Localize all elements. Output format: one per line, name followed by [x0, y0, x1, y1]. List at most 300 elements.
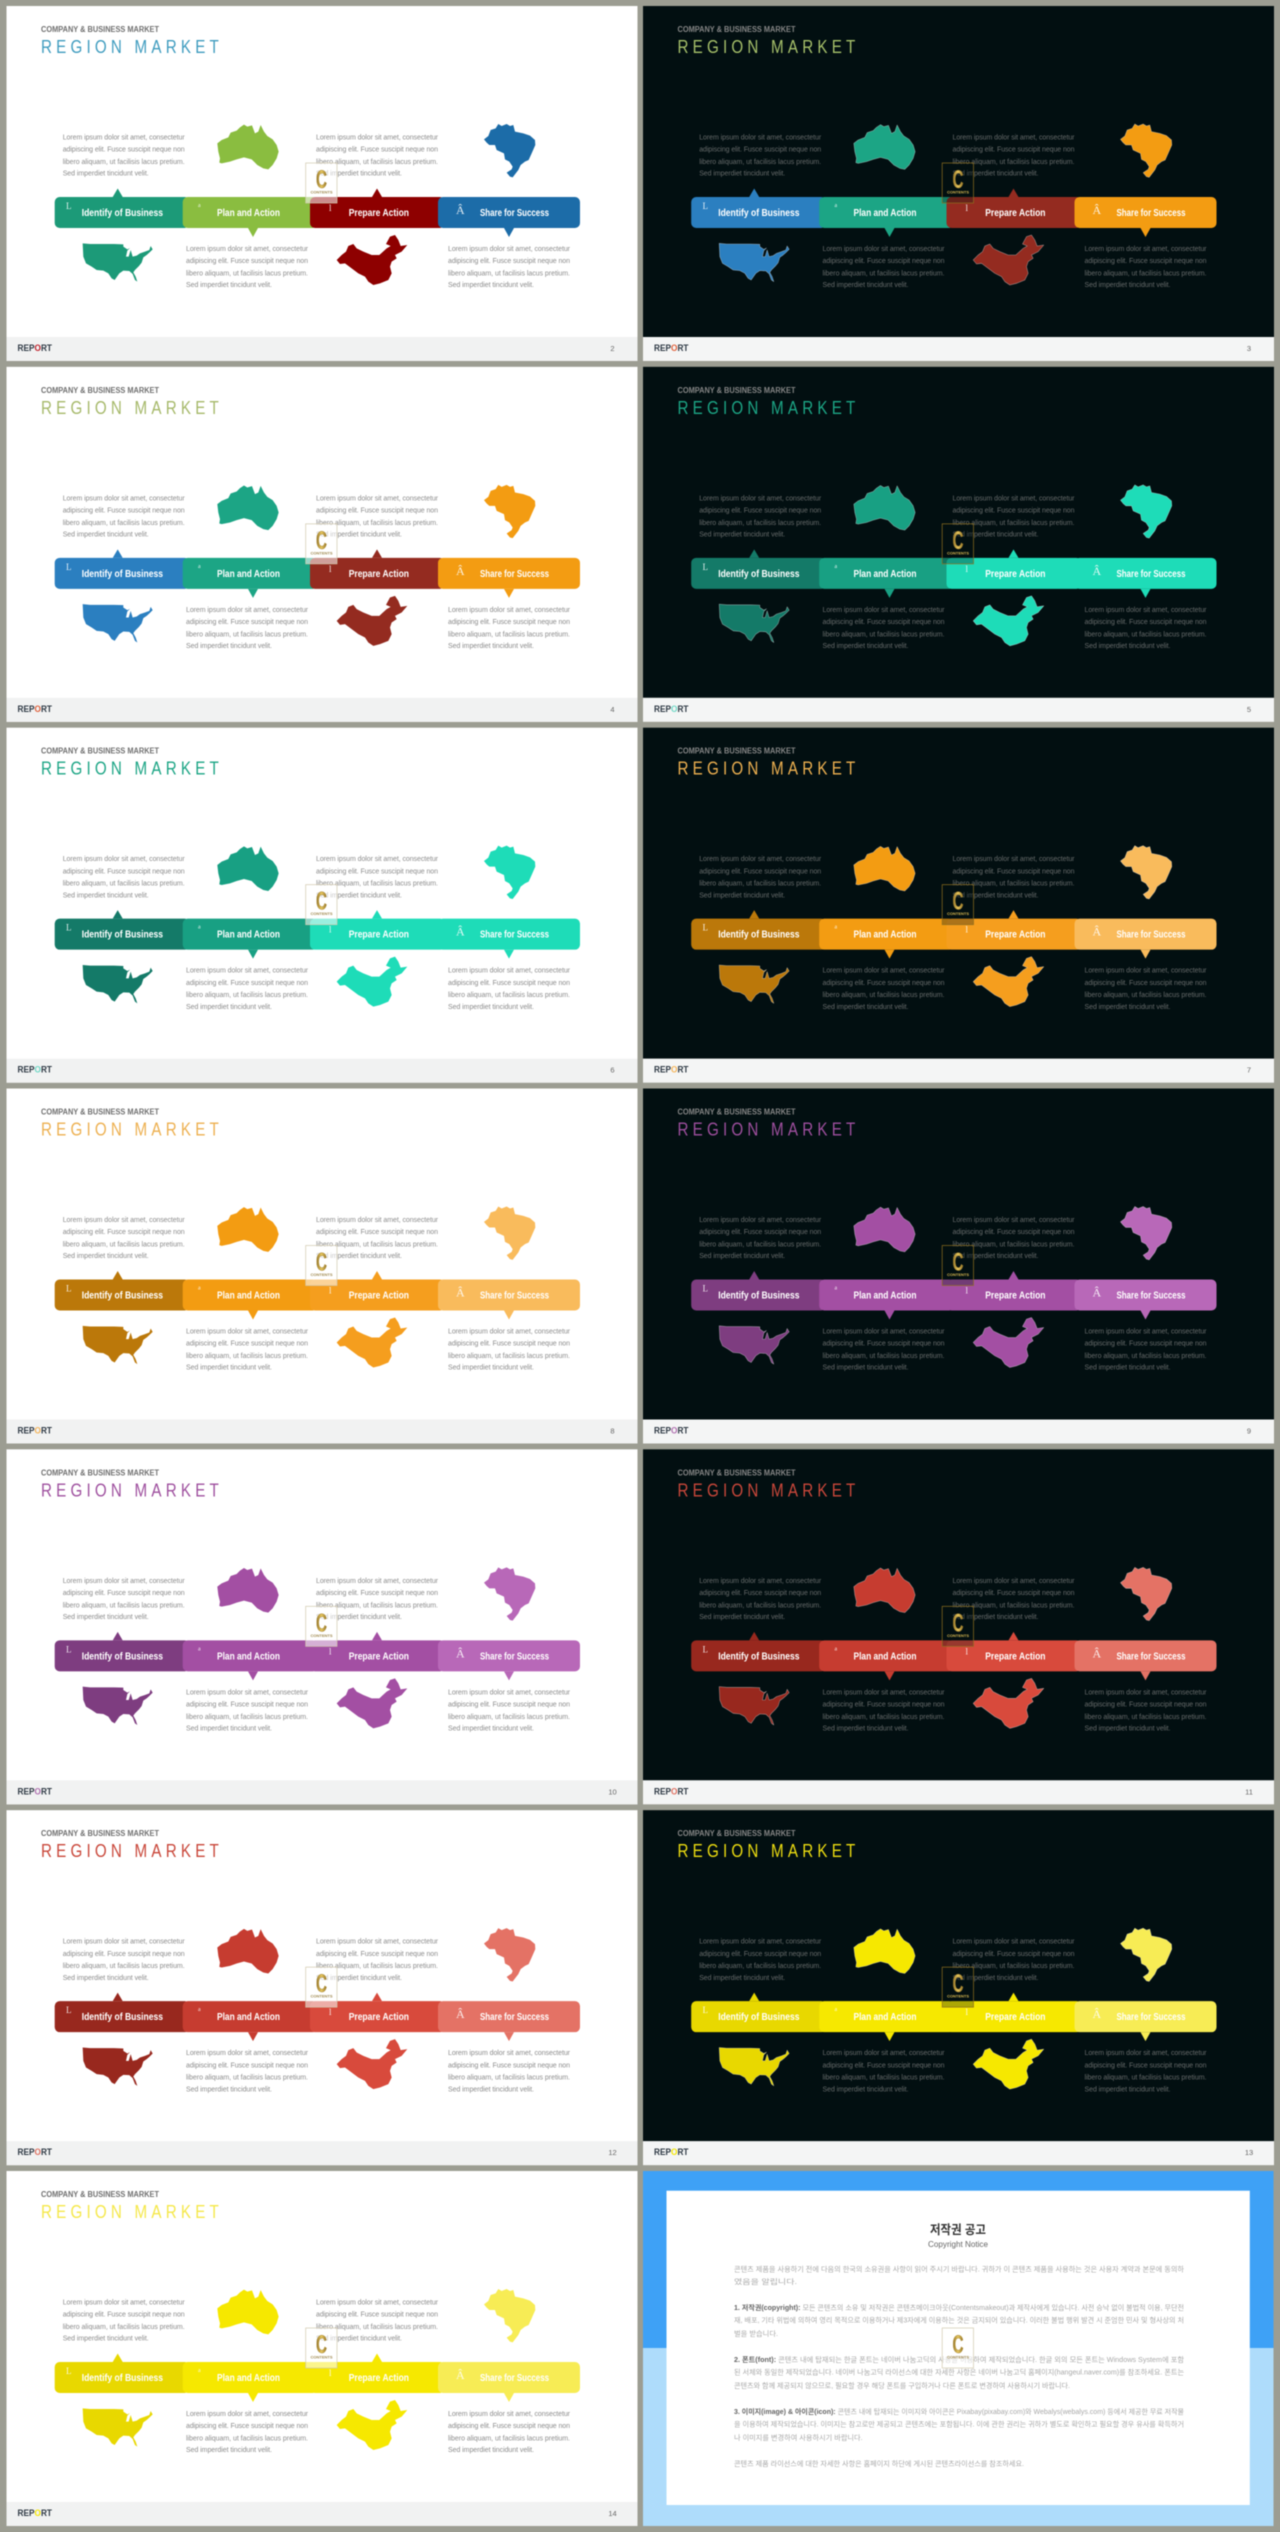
step bar: l — [966, 925, 968, 935]
watermark logo — [306, 1246, 337, 1286]
slide background — [6, 367, 638, 722]
text block 2: libero aliquam, ut facilisis lacus pretium. — [186, 270, 308, 278]
step bar: Share for Success — [480, 929, 549, 941]
text block 2: libero aliquam, ut facilisis lacus pretium. — [186, 1353, 308, 1360]
text block 3: adipiscing elit. Fusce suscipit neque non — [952, 1590, 1075, 1597]
text block 2: libero aliquam, ut facilisis lacus pretium. — [186, 2436, 308, 2442]
watermark logo — [306, 1606, 337, 1646]
step bar: Plan and Action — [217, 1650, 280, 1662]
text block 4: adipiscing elit. Fusce suscipit neque non — [1084, 619, 1207, 626]
watermark logo: C — [316, 166, 327, 194]
step bar: Plan and Action — [854, 1290, 916, 1302]
step bar: L — [66, 1284, 72, 1294]
footer bar — [6, 1059, 638, 1083]
step bar: L — [66, 1644, 72, 1654]
text block 2: Sed imperdiet tincidunt velit. — [822, 2086, 909, 2093]
text block 1: libero aliquam, ut facilisis lacus pretium. — [699, 1242, 821, 1248]
text block 3: Lorem ipsum dolor sit amet, consectetur — [316, 2300, 439, 2306]
footer bar — [643, 698, 1274, 722]
text block 1: libero aliquam, ut facilisis lacus pretium. — [63, 2324, 185, 2331]
map: Australia — [854, 1929, 915, 1973]
step bar: a — [198, 1286, 201, 1292]
text block 2: Lorem ipsum dolor sit amet, consectetur — [822, 246, 945, 253]
step bar: Plan and Action — [854, 568, 916, 580]
text block 3: Lorem ipsum dolor sit amet, consectetur — [316, 495, 439, 502]
text block 1: Sed imperdiet tincidunt velit. — [63, 2336, 149, 2343]
map: China — [337, 1317, 407, 1367]
step bar: Identify of Business — [82, 2372, 163, 2384]
text block 2: libero aliquam, ut facilisis lacus pretium. — [822, 992, 945, 999]
text block 1: Lorem ipsum dolor sit amet, consectetur — [699, 1939, 822, 1946]
text block 4: libero aliquam, ut facilisis lacus pretium. — [1084, 270, 1207, 278]
step bar: Prepare Action — [985, 1650, 1046, 1662]
font paragraph: 된 서체와 동일한 제작되었습니다. 네이버 나눔고딕 라이선스에 대한 자세한 사항은 네이버 나눔고딕 홈페이지(hangeul.naver.com)를 참조하세요. 폰트는 — [734, 2368, 1185, 2377]
text block 3: libero aliquam, ut facilisis lacus pretium. — [316, 1242, 438, 1248]
step bar: L — [702, 1644, 708, 1654]
text block 1: libero aliquam, ut facilisis lacus pretium. — [63, 1242, 185, 1248]
watermark logo — [942, 163, 974, 203]
step bar: Â — [456, 1286, 465, 1300]
text block 3: libero aliquam, ut facilisis lacus pretium. — [952, 520, 1075, 527]
text block 4: libero aliquam, ut facilisis lacus pretium. — [448, 992, 570, 999]
text block 4: Sed imperdiet tincidunt velit. — [1084, 1365, 1171, 1372]
text block 3: Sed imperdiet tincidunt velit. — [316, 171, 402, 178]
text block 2: Lorem ipsum dolor sit amet, consectetur — [186, 1689, 309, 1696]
map: China — [973, 2039, 1044, 2089]
panel: slide 4 — [6, 367, 638, 722]
text block 2: libero aliquam, ut facilisis lacus pretium. — [822, 2075, 945, 2082]
step bar: a — [198, 203, 201, 209]
watermark logo — [306, 1967, 337, 2007]
text block 3: Lorem ipsum dolor sit amet, consectetur — [952, 134, 1075, 142]
step bar: Share for Success — [480, 2372, 549, 2384]
step bar: Plan and Action — [854, 929, 916, 941]
step bar: a — [834, 1286, 838, 1292]
text block 3: libero aliquam, ut facilisis lacus pretium. — [316, 2324, 438, 2331]
text block 1: Lorem ipsum dolor sit amet, consectetur — [63, 1939, 185, 1946]
text block 3: Sed imperdiet tincidunt velit. — [952, 1614, 1039, 1621]
text block 1: Sed imperdiet tincidunt velit. — [699, 892, 785, 899]
text block 2: Sed imperdiet tincidunt velit. — [186, 2447, 272, 2454]
text block 1: libero aliquam, ut facilisis lacus pretium. — [63, 881, 185, 888]
step bar: Share for Success — [1116, 2011, 1186, 2023]
text block 1: libero aliquam, ut facilisis lacus pretium. — [699, 881, 821, 888]
text block 2: Sed imperdiet tincidunt velit. — [186, 1365, 272, 1372]
text block 4: Sed imperdiet tincidunt velit. — [1084, 1004, 1171, 1011]
map: USA — [83, 2047, 153, 2086]
step bar: Prepare Action — [985, 2011, 1046, 2023]
text block 2: libero aliquam, ut facilisis lacus pretium. — [186, 2075, 308, 2082]
map: China — [973, 596, 1044, 646]
step bar: Share for Success — [480, 1650, 549, 1662]
text block 4: libero aliquam, ut facilisis lacus pretium. — [448, 2436, 570, 2442]
text block 4: Sed imperdiet tincidunt velit. — [448, 1004, 534, 1011]
text block 1: adipiscing elit. Fusce suscipit neque non — [699, 1590, 821, 1597]
panel: slide 13 — [643, 1810, 1274, 2165]
watermark logo: C — [316, 1970, 327, 1998]
step bar: a — [198, 564, 201, 570]
image paragraph: 나 이미지를 변경하여 사용하시기 바랍니다. — [734, 2433, 863, 2442]
text block 4: adipiscing elit. Fusce suscipit neque non — [1084, 258, 1207, 265]
step bar: Â — [1092, 925, 1102, 939]
step bar: Share for Success — [480, 207, 549, 219]
watermark logo: C — [316, 1248, 327, 1276]
text block 1: Sed imperdiet tincidunt velit. — [63, 1253, 149, 1260]
text block 4: Sed imperdiet tincidunt velit. — [448, 2086, 534, 2093]
step bar: L — [702, 1284, 708, 1294]
step bar: l — [329, 925, 332, 935]
footer bar — [643, 1420, 1274, 1444]
step bar: L — [66, 923, 72, 933]
text block 4: Lorem ipsum dolor sit amet, consectetur — [448, 1689, 571, 1696]
title: REGION MARKET — [678, 1480, 860, 1500]
text block 3: libero aliquam, ut facilisis lacus pretium. — [952, 159, 1075, 166]
step bar: Â — [1092, 1286, 1102, 1300]
map: Brazil — [1120, 1567, 1172, 1621]
text block 4: libero aliquam, ut facilisis lacus pretium. — [1084, 1714, 1207, 1721]
map: Brazil — [484, 1928, 535, 1981]
text block 2: Lorem ipsum dolor sit amet, consectetur — [186, 246, 309, 253]
panel: slide 7 — [643, 728, 1274, 1083]
text block 2: Sed imperdiet tincidunt velit. — [186, 1004, 272, 1011]
text block 4: adipiscing elit. Fusce suscipit neque non — [448, 1702, 570, 1709]
watermark logo: CONTENTS — [947, 911, 969, 916]
copyright paragraph: 1. 저작권(copyright): 모든 콘텐츠의 소유 및 저작권은 콘텐츠메이크아웃(Contentsmakeout)과 제작사에게 있습니다. 사전 승낙 없이 불법적 이용, 무단전 — [734, 2303, 1184, 2312]
footer bar — [6, 1420, 638, 1444]
text block 1: libero aliquam, ut facilisis lacus pretium. — [63, 159, 185, 166]
text block 2: Lorem ipsum dolor sit amet, consectetur — [822, 968, 945, 975]
slide background — [6, 1810, 638, 2165]
notice subheading: Copyright Notice — [928, 2239, 988, 2249]
blue upper background — [643, 2171, 1274, 2348]
eyebrow heading: COMPANY & BUSINESS MARKET — [678, 1467, 796, 1477]
step bar: a — [834, 2007, 838, 2013]
step bar: l — [329, 203, 332, 213]
slide background — [643, 728, 1274, 1059]
watermark logo: CONTENTS — [947, 2354, 969, 2360]
step bar: Prepare Action — [349, 929, 409, 941]
step bar: Prepare Action — [349, 207, 409, 219]
text block 1: adipiscing elit. Fusce suscipit neque non — [699, 868, 821, 875]
step bar — [55, 549, 580, 598]
text block 1: libero aliquam, ut facilisis lacus pretium. — [63, 520, 185, 527]
title: REGION MARKET — [41, 2202, 223, 2222]
step bar: Share for Success — [1116, 1650, 1186, 1662]
map: Australia — [854, 125, 915, 169]
eyebrow heading: COMPANY & BUSINESS MARKET — [41, 24, 160, 34]
step bar: Identify of Business — [718, 1290, 800, 1302]
watermark logo: CONTENTS — [947, 1994, 969, 1999]
map: China — [337, 1678, 407, 1728]
text block 4: Lorem ipsum dolor sit amet, consectetur — [1084, 1689, 1207, 1696]
text block 4: adipiscing elit. Fusce suscipit neque non — [448, 1341, 570, 1348]
map: USA — [719, 2047, 789, 2086]
text block 1: adipiscing elit. Fusce suscipit neque non — [63, 1229, 185, 1236]
title: REGION MARKET — [678, 1841, 860, 1861]
image paragraph: 3. 이미지(image) & 아이콘(icon): 콘텐츠 내에 탑재되는 이미지와 아이콘은 Pixabay(pixabay.com)와 Webalys(webalys.com) 등에서 제공한 무료 저작물 — [734, 2407, 1185, 2416]
text block 4: Sed imperdiet tincidunt velit. — [448, 2447, 534, 2454]
step bar — [691, 549, 1216, 598]
text block 3: libero aliquam, ut facilisis lacus pretium. — [316, 881, 438, 888]
footer bar — [6, 2502, 638, 2526]
footer label: REPORT — [654, 343, 689, 354]
watermark logo: C — [952, 1970, 964, 1998]
text block 1: libero aliquam, ut facilisis lacus pretium. — [63, 1963, 185, 1970]
text block 4: Sed imperdiet tincidunt velit. — [448, 643, 534, 650]
map: Australia — [854, 1207, 915, 1252]
step bar: Â — [456, 925, 465, 939]
text block 4: Lorem ipsum dolor sit amet, consectetur — [1084, 2050, 1207, 2057]
text block 3: adipiscing elit. Fusce suscipit neque non — [952, 1951, 1075, 1958]
text block 1: Lorem ipsum dolor sit amet, consectetur — [699, 134, 822, 142]
text block 4: libero aliquam, ut facilisis lacus pretium. — [1084, 631, 1207, 638]
text block 3: Sed imperdiet tincidunt velit. — [316, 892, 402, 899]
map: Brazil — [1120, 1206, 1172, 1260]
text block 3: libero aliquam, ut facilisis lacus pretium. — [952, 1963, 1075, 1970]
step bar: Â — [456, 2368, 465, 2382]
map: Australia — [217, 1929, 279, 1973]
text block 3: adipiscing elit. Fusce suscipit neque non — [952, 868, 1075, 875]
step bar: Plan and Action — [217, 929, 280, 941]
step bar: l — [966, 564, 968, 574]
text block 1: Sed imperdiet tincidunt velit. — [63, 1614, 149, 1621]
title: REGION MARKET — [41, 398, 223, 418]
text block 3: Sed imperdiet tincidunt velit. — [316, 2336, 402, 2343]
step bar: L — [702, 923, 708, 933]
footer label: REPORT — [654, 1426, 689, 1436]
step bar: L — [66, 2005, 72, 2015]
step bar — [691, 1632, 1216, 1680]
page number: 6 — [610, 1066, 615, 1075]
watermark logo: C — [316, 527, 327, 555]
text block 3: libero aliquam, ut facilisis lacus pretium. — [316, 520, 438, 527]
step bar: L — [66, 201, 72, 211]
footer label: REPORT — [18, 2147, 52, 2158]
text block 4: libero aliquam, ut facilisis lacus pretium. — [448, 1353, 570, 1360]
step bar: Â — [1092, 1646, 1102, 1660]
map: Brazil — [484, 124, 535, 177]
step bar: a — [198, 2368, 201, 2374]
watermark logo — [942, 1606, 974, 1646]
slide background — [6, 1088, 638, 1444]
text block 2: Lorem ipsum dolor sit amet, consectetur — [822, 1689, 945, 1696]
text block 1: libero aliquam, ut facilisis lacus pretium. — [63, 1602, 185, 1609]
text block 4: libero aliquam, ut facilisis lacus pretium. — [448, 2075, 570, 2082]
step bar: a — [834, 564, 838, 570]
page number: 14 — [608, 2509, 617, 2518]
text block 1: adipiscing elit. Fusce suscipit neque non — [63, 1951, 185, 1958]
text block 1: adipiscing elit. Fusce suscipit neque non — [63, 1590, 185, 1597]
watermark logo: C — [316, 1609, 327, 1637]
step bar: l — [966, 203, 968, 213]
step bar: Plan and Action — [854, 1650, 916, 1662]
text block 3: Lorem ipsum dolor sit amet, consectetur — [952, 856, 1075, 863]
footer bar — [643, 337, 1274, 361]
text block 1: adipiscing elit. Fusce suscipit neque non — [63, 508, 185, 515]
text block 1: Sed imperdiet tincidunt velit. — [699, 171, 785, 178]
step bar: a — [834, 1646, 838, 1652]
text block 4: Lorem ipsum dolor sit amet, consectetur — [448, 246, 571, 253]
footer bar — [643, 1059, 1274, 1083]
footer bar — [6, 2141, 638, 2165]
text block 2: adipiscing elit. Fusce suscipit neque non — [186, 2423, 308, 2430]
step bar: l — [329, 2368, 332, 2378]
title: REGION MARKET — [41, 1480, 223, 1500]
map: USA — [719, 1326, 789, 1364]
text block 3: Sed imperdiet tincidunt velit. — [952, 171, 1039, 178]
step bar: Plan and Action — [217, 1290, 280, 1302]
map: Australia — [217, 125, 279, 169]
step bar: L — [66, 562, 72, 572]
step bar: Identify of Business — [718, 929, 800, 941]
text block 4: Sed imperdiet tincidunt velit. — [1084, 282, 1171, 289]
title: REGION MARKET — [41, 1841, 223, 1861]
text block 4: Lorem ipsum dolor sit amet, consectetur — [1084, 607, 1207, 614]
text block 1: Lorem ipsum dolor sit amet, consectetur — [63, 495, 185, 502]
map: Australia — [854, 846, 915, 891]
map: USA — [719, 1687, 789, 1725]
text block 3: Sed imperdiet tincidunt velit. — [952, 892, 1039, 899]
text block 3: Lorem ipsum dolor sit amet, consectetur — [952, 495, 1075, 502]
copyright paragraph — [734, 2303, 1184, 2338]
eyebrow heading: COMPANY & BUSINESS MARKET — [678, 1106, 796, 1116]
text block 4: adipiscing elit. Fusce suscipit neque non — [448, 2423, 570, 2430]
step bar: Prepare Action — [349, 1650, 409, 1662]
panel: slide 10 — [6, 1449, 638, 1804]
footer label: REPORT — [654, 1065, 689, 1076]
text block 3: Lorem ipsum dolor sit amet, consectetur — [316, 1217, 439, 1224]
step bar: Â — [456, 203, 465, 217]
text block 1: Sed imperdiet tincidunt velit. — [699, 1253, 785, 1260]
step bar: Identify of Business — [718, 207, 800, 219]
step bar: Identify of Business — [718, 2011, 800, 2023]
footer bar — [643, 2141, 1274, 2165]
watermark logo: CONTENTS — [310, 190, 333, 194]
panel: slide 6 — [6, 728, 638, 1083]
footer label: REPORT — [18, 1065, 52, 1076]
text block 1: libero aliquam, ut facilisis lacus pretium. — [699, 1963, 821, 1970]
text block 4: Lorem ipsum dolor sit amet, consectetur — [1084, 246, 1207, 253]
step bar: Plan and Action — [217, 568, 280, 580]
text block 3: Sed imperdiet tincidunt velit. — [316, 532, 402, 539]
text block 3: adipiscing elit. Fusce suscipit neque non — [316, 1229, 438, 1236]
text block 3: adipiscing elit. Fusce suscipit neque non — [952, 147, 1075, 154]
text block 1: Lorem ipsum dolor sit amet, consectetur — [699, 1217, 822, 1224]
slide background — [6, 6, 638, 361]
eyebrow heading: COMPANY & BUSINESS MARKET — [678, 385, 796, 395]
panel: slide 12 — [6, 1810, 638, 2165]
step bar: Prepare Action — [985, 1290, 1046, 1302]
text block 4: adipiscing elit. Fusce suscipit neque non — [448, 2062, 570, 2069]
watermark logo: C — [952, 1248, 964, 1276]
page number: 4 — [610, 705, 615, 714]
map: Australia — [217, 846, 279, 891]
title: REGION MARKET — [41, 759, 223, 779]
title: REGION MARKET — [678, 1120, 860, 1140]
watermark logo: CONTENTS — [310, 1633, 333, 1638]
notice heading: 저작권 공고 — [930, 2222, 986, 2237]
text block 2: Lorem ipsum dolor sit amet, consectetur — [822, 607, 945, 614]
panel: slide 8 — [6, 1088, 638, 1444]
text block 1: Lorem ipsum dolor sit amet, consectetur — [699, 495, 822, 502]
text block 2: Sed imperdiet tincidunt velit. — [186, 282, 272, 289]
text block 2: Sed imperdiet tincidunt velit. — [822, 282, 909, 289]
watermark logo: CONTENTS — [947, 550, 969, 555]
text block 3: Lorem ipsum dolor sit amet, consectetur — [952, 1939, 1075, 1946]
step bar: Plan and Action — [217, 2372, 280, 2384]
watermark logo — [942, 524, 974, 564]
step bar — [55, 1632, 580, 1680]
footer label: REPORT — [654, 1786, 689, 1797]
step bar: Â — [1092, 203, 1102, 217]
text block 4: Lorem ipsum dolor sit amet, consectetur — [1084, 968, 1207, 975]
text block 1: Lorem ipsum dolor sit amet, consectetur — [63, 1217, 185, 1224]
footer label: REPORT — [18, 343, 52, 354]
page number: 12 — [608, 2148, 617, 2157]
text block 1: Lorem ipsum dolor sit amet, consectetur — [699, 1578, 822, 1585]
watermark logo — [306, 2328, 337, 2368]
title: REGION MARKET — [678, 37, 860, 57]
footer bar — [643, 1780, 1274, 1804]
map: China — [337, 235, 407, 285]
copyright paragraph: 재, 배포, 기타 위법에 의하여 영리 목적으로 이용하거나 제3자에게 이용하는 것은 금지되어 있습니다. 이러한 불법 행위 발견 시 준엄한 민사 및 형사상의 처 — [734, 2316, 1184, 2325]
map: USA — [83, 2408, 153, 2447]
map: Australia — [217, 485, 279, 530]
text block 2: Sed imperdiet tincidunt velit. — [186, 643, 272, 650]
watermark logo: CONTENTS — [310, 1272, 333, 1277]
text block 3: Sed imperdiet tincidunt velit. — [952, 1253, 1039, 1260]
text block 4: adipiscing elit. Fusce suscipit neque non — [1084, 2062, 1207, 2069]
page number: 10 — [608, 1787, 617, 1796]
watermark logo: C — [952, 1609, 964, 1637]
text block 2: adipiscing elit. Fusce suscipit neque non — [822, 1702, 945, 1709]
text block 4: libero aliquam, ut facilisis lacus pretium. — [448, 1714, 570, 1721]
step bar — [691, 188, 1216, 237]
text block 3: adipiscing elit. Fusce suscipit neque non — [316, 1951, 438, 1958]
footer bar — [6, 337, 638, 361]
map: Australia — [854, 485, 915, 530]
text block 4: adipiscing elit. Fusce suscipit neque non — [1084, 1702, 1207, 1709]
text block 1: adipiscing elit. Fusce suscipit neque non — [699, 1951, 821, 1958]
font paragraph — [734, 2355, 1185, 2390]
map: Australia — [217, 1207, 279, 1252]
eyebrow heading: COMPANY & BUSINESS MARKET — [41, 2189, 160, 2199]
text block 1: adipiscing elit. Fusce suscipit neque non — [63, 147, 185, 154]
text block 4: adipiscing elit. Fusce suscipit neque non — [448, 258, 570, 265]
slide background — [643, 1088, 1274, 1420]
map: Australia — [217, 1568, 279, 1613]
text block 2: adipiscing elit. Fusce suscipit neque non — [186, 258, 308, 265]
footer label: REPORT — [18, 2508, 52, 2519]
text block 2: libero aliquam, ut facilisis lacus pretium. — [822, 270, 945, 278]
text block 3: Lorem ipsum dolor sit amet, consectetur — [952, 1217, 1075, 1224]
map: Brazil — [484, 2289, 535, 2342]
text block 1: adipiscing elit. Fusce suscipit neque non — [699, 508, 821, 515]
text block 3: adipiscing elit. Fusce suscipit neque non — [316, 147, 438, 154]
map: Brazil — [484, 1567, 535, 1621]
footer bar — [6, 698, 638, 722]
text block 3: Lorem ipsum dolor sit amet, consectetur — [952, 1578, 1075, 1585]
footer label: REPORT — [654, 704, 689, 715]
light blue lower background — [643, 2348, 1274, 2526]
step bar — [691, 1993, 1216, 2041]
watermark logo: CONTENTS — [310, 550, 333, 555]
eyebrow heading: COMPANY & BUSINESS MARKET — [41, 746, 160, 756]
page number: 2 — [610, 344, 615, 353]
watermark logo: C — [316, 2331, 327, 2359]
intro paragraph: 콘텐츠 제품을 사용하기 전에 다음의 한국의 소유권을 사항이 읽어 주시기 바랍니다. 귀하가 이 콘텐츠 제품을 사용하는 것은 사용자 계약과 본문에 동의하 — [734, 2264, 1185, 2274]
text block 1: Sed imperdiet tincidunt velit. — [699, 1614, 785, 1621]
